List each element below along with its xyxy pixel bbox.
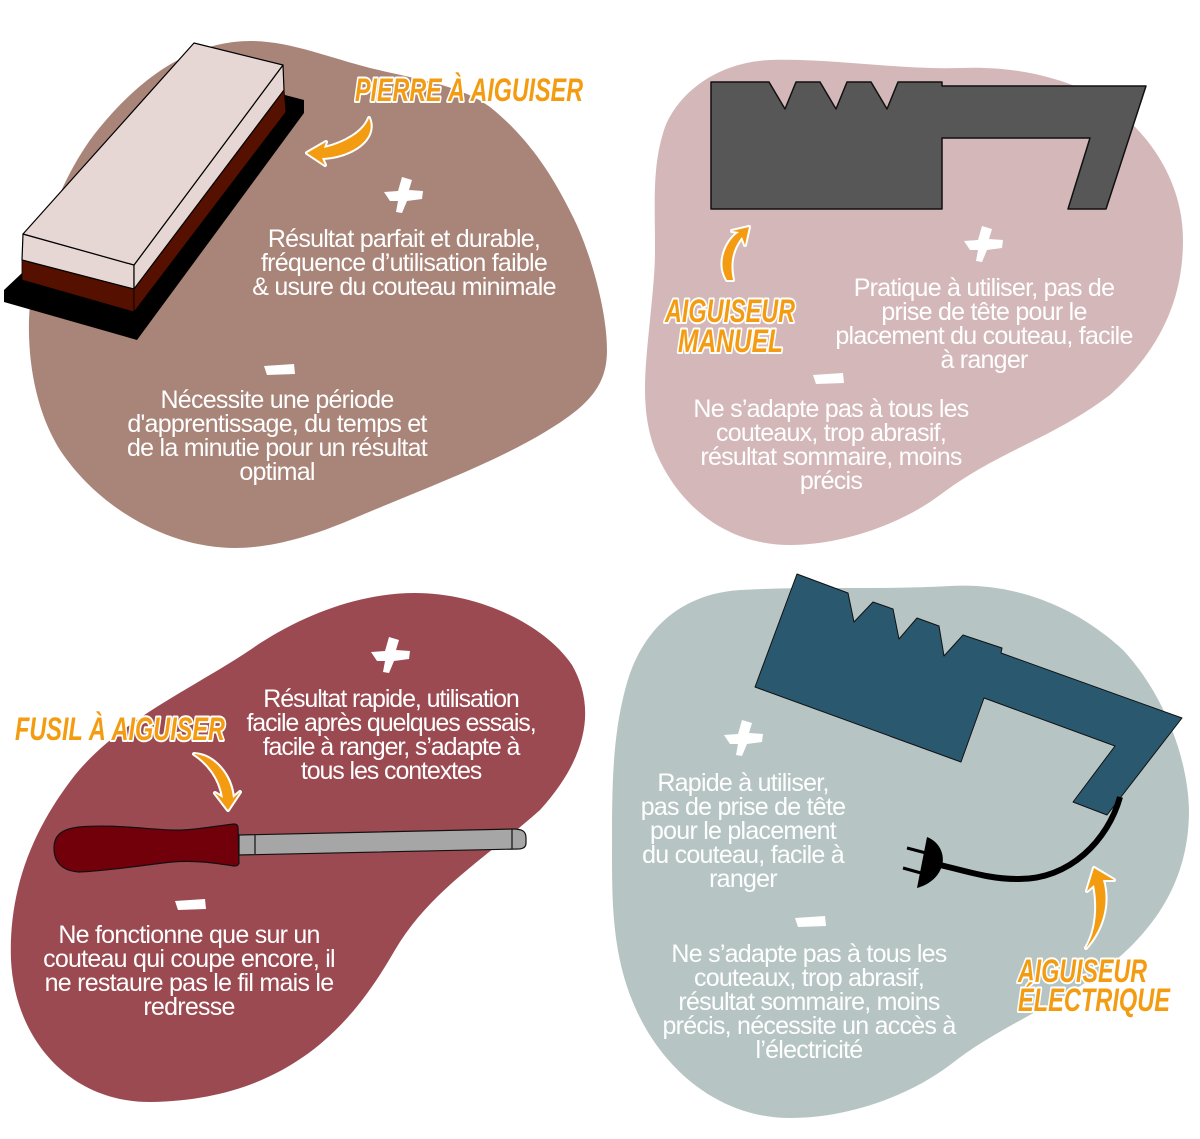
text: pros of the manual sharpener: à ranger xyxy=(940,346,1028,374)
text: cons of the electric sharpener: résultat sommaire, moins xyxy=(678,988,940,1016)
icon: minus xyxy=(175,899,206,910)
text: pros of the manual sharpener: placement du couteau, facile xyxy=(835,322,1133,350)
text: pros of the electric sharpener: ranger xyxy=(709,865,777,893)
text: pros of the electric sharpener: du couteau, facile à xyxy=(642,841,845,869)
text: pros of the stone: & usure du couteau minimale xyxy=(252,273,556,301)
icon: electric sharpener xyxy=(755,574,1182,815)
label: aiguiseur électrique xyxy=(1017,953,1171,1018)
label: pierre à aiguiser: PIERRE À AIGUISER xyxy=(355,72,583,108)
icon: plus xyxy=(371,637,410,673)
text: cons of the manual sharpener: résultat sommaire, moins xyxy=(700,443,962,471)
icon: minus xyxy=(795,916,826,927)
blob background: pierre xyxy=(29,41,607,548)
text: cons of the stone: Nécessite une période xyxy=(160,386,394,414)
text: pros of the stone: fréquence d’utilisation faible xyxy=(261,249,547,277)
text: cons of the electric sharpener: couteaux, trop abrasif, xyxy=(694,964,924,992)
icon: minus xyxy=(264,364,295,375)
text: pros of the electric sharpener: pour le placement xyxy=(650,817,837,845)
icon: power cord and plug xyxy=(903,797,1120,888)
blob background: manuel xyxy=(645,60,1183,545)
arrow: to the stone xyxy=(307,118,371,165)
arrow: to the electric sharpener xyxy=(1086,868,1114,948)
blob background: fusil xyxy=(11,593,585,1102)
panel: pierre à aiguiser xyxy=(4,41,607,548)
text: cons of the manual sharpener: précis xyxy=(800,467,862,495)
text: cons of the stone: optimal xyxy=(239,458,315,486)
text: cons of the electric sharpener: l’électricité xyxy=(756,1036,862,1064)
text: cons of the manual sharpener: Ne s’adapte pas à tous les xyxy=(693,395,969,423)
blob background: électrique xyxy=(612,586,1189,1118)
icon: plus xyxy=(724,720,763,756)
panel: fusil à aiguiser xyxy=(11,593,585,1102)
icon: sharpening stone xyxy=(4,43,304,340)
text: cons of the stone: d'apprentissage, du temps et xyxy=(127,410,427,438)
text: pros of the honing steel: tous les contextes xyxy=(301,757,482,785)
text: cons of the honing steel: Ne fonctionne que sur un xyxy=(58,921,320,949)
text: pros of the electric sharpener: pas de prise de tête xyxy=(641,793,845,821)
text: pros of the stone: Résultat parfait et durable, xyxy=(268,225,540,253)
icon: plus xyxy=(384,177,423,213)
text: cons of the electric sharpener: précis, nécessite un accès à xyxy=(662,1012,956,1040)
text: cons of the honing steel: redresse xyxy=(143,993,235,1021)
text: cons of the honing steel: ne restaure pas le fil mais le xyxy=(45,969,333,997)
text: pros of the honing steel: facile après quelques essais, xyxy=(246,709,536,737)
arrow: to the manual sharpener xyxy=(722,227,749,280)
label: fusil à aiguiser: FUSIL À AIGUISER xyxy=(15,711,225,747)
text: pros of the honing steel: facile à ranger, s’adapte à xyxy=(263,733,520,761)
label: aiguiseur électrique: AIGUISEUR xyxy=(1017,953,1147,989)
text: cons of the stone: de la minutie pour un résultat xyxy=(127,434,428,462)
panel: aiguiseur électrique xyxy=(612,574,1189,1118)
icon: minus xyxy=(813,373,844,384)
text: pros of the electric sharpener: Rapide à utiliser, xyxy=(657,769,829,797)
label: aiguiseur manuel xyxy=(664,293,795,359)
label: aiguiseur manuel: MANUEL xyxy=(678,323,783,359)
text: cons of the manual sharpener: couteaux, trop abrasif, xyxy=(716,419,946,447)
text: cons of the electric sharpener: Ne s’adapte pas à tous les xyxy=(671,940,947,968)
text: pros of the honing steel: Résultat rapide, utilisation xyxy=(263,685,519,713)
arrow: to the honing steel xyxy=(194,754,240,810)
icon: plus xyxy=(964,226,1003,262)
icon: honing steel xyxy=(54,824,526,872)
text: pros of the manual sharpener: Pratique à utiliser, pas de xyxy=(854,274,1114,302)
text: cons of the honing steel: couteau qui coupe encore, il xyxy=(43,945,335,973)
label: aiguiseur manuel: AIGUISEUR xyxy=(664,293,795,329)
icon: manual sharpener xyxy=(711,82,1146,209)
panel: aiguiseur manuel xyxy=(645,60,1183,545)
text: pros of the manual sharpener: prise de tête pour le xyxy=(881,298,1087,326)
